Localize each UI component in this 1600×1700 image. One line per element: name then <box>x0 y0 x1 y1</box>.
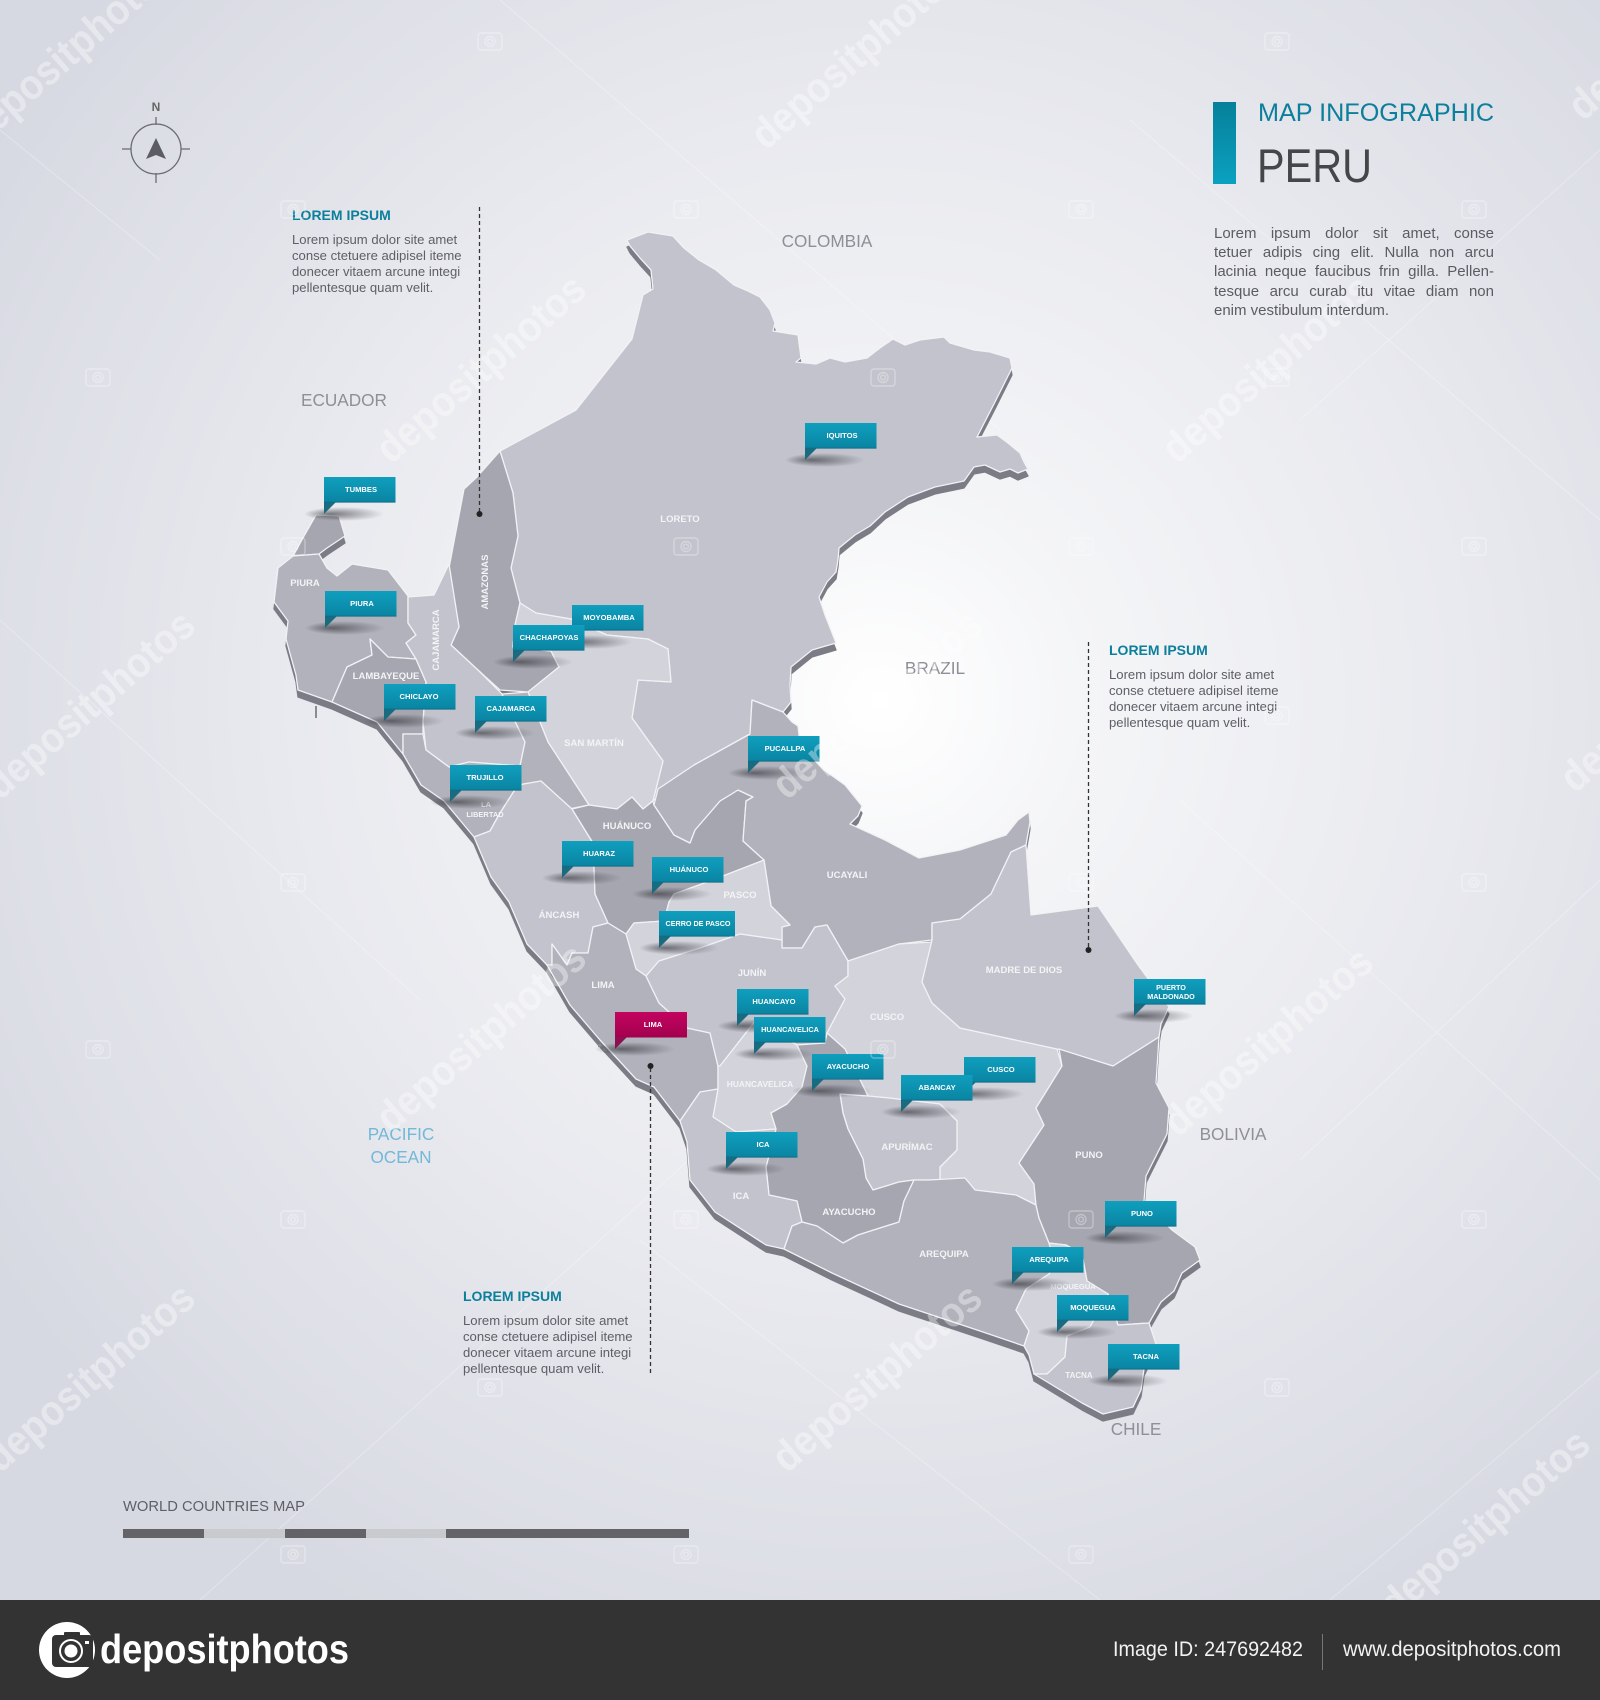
flag: Puerto Maldonado: MALDONADO <box>1147 992 1195 1001</box>
flag: Cerro de Pasco: CERRO DE PASCO <box>666 919 731 928</box>
callout: top left: LOREM IPSUM <box>292 207 391 223</box>
region labels: HUÁNUCO <box>603 821 651 832</box>
flag: Tacna: TACNA <box>1133 1352 1160 1361</box>
region labels: AREQUIPA <box>919 1249 969 1260</box>
country labels: BOLIVIA <box>1200 1124 1267 1144</box>
region labels: MADRE DE DIOS <box>986 965 1062 976</box>
flag: Puerto Maldonado: PUERTO <box>1156 983 1186 992</box>
flag: Iquitos: IQUITOS <box>826 431 858 440</box>
regions <box>274 232 1200 1414</box>
region labels: PASCO <box>723 890 757 901</box>
region labels: AMAZONAS <box>480 555 491 609</box>
region labels: PUNO <box>1075 1150 1103 1161</box>
country labels: OCEAN <box>370 1147 432 1167</box>
flag: Tumbes <box>304 477 396 521</box>
flag: Ayacucho <box>792 1054 884 1098</box>
region labels: SAN MARTÍN <box>564 738 624 749</box>
region: San Martin <box>513 603 671 809</box>
flag: Huaraz: HUARAZ <box>583 849 615 858</box>
flag: Tumbes: TUMBES <box>345 485 377 494</box>
intro paragraph: lacinia neque faucibus frin gilla. Pellen- <box>1214 263 1494 280</box>
flag: Puno: PUNO <box>1131 1209 1153 1218</box>
region: Huancavelica <box>713 1020 807 1132</box>
region: Huanuco <box>572 790 764 934</box>
callout: top left: conse ctetuere adipisel iteme <box>292 248 462 263</box>
region labels: MOQUEGUA <box>1050 1282 1096 1291</box>
footer divider <box>1322 1634 1324 1670</box>
flag: Chachapoyas <box>493 625 584 669</box>
coastal islets <box>315 706 607 1051</box>
flag: Ayacucho: AYACUCHO <box>827 1062 869 1071</box>
callout: right <box>1086 642 1279 953</box>
watermarks: depositphotos <box>762 1273 991 1481</box>
flag: Huaraz <box>542 841 634 885</box>
region labels: CUSCO <box>870 1012 904 1023</box>
flag: Lima capital <box>595 1012 687 1056</box>
region: Pasco <box>626 860 790 976</box>
callout: right: LOREM IPSUM <box>1109 642 1208 658</box>
flag: Huancavelica <box>734 1017 826 1061</box>
region: Tumbes <box>293 515 345 556</box>
country labels: PACIFIC <box>368 1124 434 1144</box>
callout: bottom: conse ctetuere adipisel iteme <box>463 1329 633 1344</box>
flag: Puerto Maldonado <box>1114 979 1206 1023</box>
region: Ayacucho <box>766 1033 914 1243</box>
flag: Huancayo: HUANCAYO <box>752 997 796 1006</box>
flag: Cerro de Pasco <box>639 911 735 955</box>
watermarks: depositphotos <box>366 933 595 1141</box>
flag: Abancay: ABANCAY <box>918 1083 956 1092</box>
flag: Moyobamba: MOYOBAMBA <box>583 613 635 622</box>
callout: right: conse ctetuere adipisel iteme <box>1109 683 1279 698</box>
callout: top left: Lorem ipsum dolor site amet <box>292 232 458 247</box>
flag: Cajamarca: CAJAMARCA <box>487 704 536 713</box>
region: Arequipa <box>784 1178 1055 1346</box>
region: Moquegua <box>1016 1243 1108 1374</box>
flag: Huanuco: HUÁNUCO <box>670 865 708 874</box>
map of Peru <box>274 232 1200 1421</box>
flag: Chiclayo <box>364 684 456 728</box>
region: Ica <box>680 1089 802 1249</box>
watermark camera icons <box>86 33 1486 1563</box>
intro paragraph: enim vestibulum interdum. <box>1214 302 1389 319</box>
region: Lambayeque <box>332 639 426 754</box>
region: Loreto <box>500 232 1028 801</box>
country labels: ECUADOR <box>301 390 387 410</box>
flag: Huancavelica: HUANCAVELICA <box>761 1025 820 1034</box>
region: La Libertad <box>403 692 589 837</box>
flag: Huancayo <box>717 989 808 1033</box>
callout: bottom: Lorem ipsum dolor site amet <box>463 1313 629 1328</box>
region: Cajamarca <box>406 564 525 767</box>
callout: right: pellentesque quam velit. <box>1109 715 1250 730</box>
region labels: CAJAMARCA <box>431 609 442 671</box>
title <box>1257 99 1494 192</box>
footer logo: depositphotos <box>100 1626 349 1672</box>
callout: top left: donecer vitaem arcune integi <box>292 264 460 279</box>
flag: Abancay <box>881 1075 972 1119</box>
region labels: LA <box>481 800 492 809</box>
region labels: ÁNCASH <box>539 910 579 921</box>
region: Tacna <box>1034 1294 1156 1414</box>
intro paragraph: Lorem ipsum dolor sit amet, conse <box>1214 225 1494 242</box>
callout: bottom: donecer vitaem arcune integi <box>463 1345 631 1360</box>
flag: Piura <box>305 591 396 635</box>
callout: top left: pellentesque quam velit. <box>292 280 433 295</box>
region labels: UCAYALI <box>827 870 867 881</box>
flag: Arequipa: AREQUIPA <box>1029 1255 1069 1264</box>
region: Lima <box>547 923 718 1121</box>
watermarks: depositphotos <box>1152 264 1381 472</box>
flag: Moquegua: MOQUEGUA <box>1070 1303 1116 1312</box>
region labels <box>290 514 1103 1380</box>
watermarks: depositphotos <box>762 600 991 808</box>
flag: Arequipa <box>992 1247 1084 1291</box>
region labels: APURÍMAC <box>881 1142 933 1153</box>
region labels: LIMA <box>591 980 615 991</box>
flag: Cusco <box>944 1057 1036 1101</box>
scale bar <box>123 1529 689 1538</box>
region: Ucayali <box>654 700 1030 961</box>
flag: Moquegua <box>1037 1295 1128 1339</box>
callout: right: donecer vitaem arcune integi <box>1109 699 1277 714</box>
callout: bottom: LOREM IPSUM <box>463 1288 562 1304</box>
flag: Chiclayo: CHICLAYO <box>400 692 439 701</box>
region: Ancash <box>474 781 608 965</box>
flag: Piura: PIURA <box>350 599 374 608</box>
title accent bar <box>1213 102 1236 184</box>
country labels: BRAZIL <box>905 658 965 678</box>
flag: Iquitos <box>785 423 876 467</box>
region labels: LORETO <box>660 514 700 525</box>
callout: bottom: pellentesque quam velit. <box>463 1361 604 1376</box>
footer bar <box>0 1600 1600 1700</box>
flag: Lima capital: LIMA <box>644 1020 663 1029</box>
footer website: www.depositphotos.com <box>1342 1638 1561 1661</box>
icon: compass <box>122 100 190 183</box>
region labels: ICA <box>733 1191 749 1202</box>
title: PERU <box>1257 139 1372 192</box>
callout: right: Lorem ipsum dolor site amet <box>1109 667 1275 682</box>
flag: Huanuco <box>632 857 724 901</box>
intro paragraph <box>1214 225 1494 319</box>
region: Cusco <box>827 942 1062 1205</box>
callout: bottom <box>463 1063 654 1376</box>
region: Amazonas <box>449 451 559 692</box>
country labels: CHILE <box>1111 1419 1161 1439</box>
flag: Pucallpa <box>728 736 820 780</box>
region: Madre de Dios <box>922 845 1169 1066</box>
region: Junin <box>646 925 848 1066</box>
flag: Chachapoyas: CHACHAPOYAS <box>520 633 578 642</box>
footer image id: Image ID: 247692482 <box>1113 1638 1303 1661</box>
region: Piura <box>274 554 416 702</box>
region labels: LAMBAYEQUE <box>353 671 419 682</box>
country labels <box>301 231 1267 1439</box>
flag: Cajamarca <box>455 696 546 740</box>
intro paragraph: tetuer adipis cing elit. Nulla non arcu <box>1214 244 1494 261</box>
region: Apurimac <box>840 1094 957 1190</box>
region labels: AYACUCHO <box>822 1207 876 1218</box>
watermarks: depositphotos <box>1153 937 1382 1145</box>
footer logo <box>39 1622 349 1678</box>
icon: compass: N <box>152 100 160 114</box>
scale label: WORLD COUNTRIES MAP <box>123 1498 305 1515</box>
map extruded coast shadow <box>274 239 1200 1421</box>
flag: Trujillo: TRUJILLO <box>466 773 504 782</box>
callout: top left <box>292 207 482 517</box>
region labels: HUANCAVELICA <box>727 1079 793 1089</box>
flag: Puno <box>1085 1201 1176 1245</box>
intro paragraph: tesque arcu curab itu vitae diam non <box>1214 283 1494 300</box>
flag: Tacna <box>1088 1344 1180 1388</box>
region: Puno <box>1019 1037 1200 1325</box>
region labels: JUNÍN <box>738 968 766 979</box>
flag: Moyobamba <box>552 605 644 649</box>
flag: Ica <box>706 1132 798 1176</box>
region labels: TACNA <box>1065 1371 1093 1380</box>
flag: Trujillo <box>430 765 522 809</box>
region labels: LIBERTAD <box>466 810 504 819</box>
flag: Pucallpa: PUCALLPA <box>765 744 806 753</box>
flag: Ica: ICA <box>756 1140 770 1149</box>
region labels: PIURA <box>290 578 320 589</box>
watermarks: depositphotos <box>366 264 595 472</box>
title: MAP INFOGRAPHIC <box>1258 99 1494 127</box>
country labels: COLOMBIA <box>782 231 873 251</box>
flag: Cusco: CUSCO <box>987 1065 1015 1074</box>
